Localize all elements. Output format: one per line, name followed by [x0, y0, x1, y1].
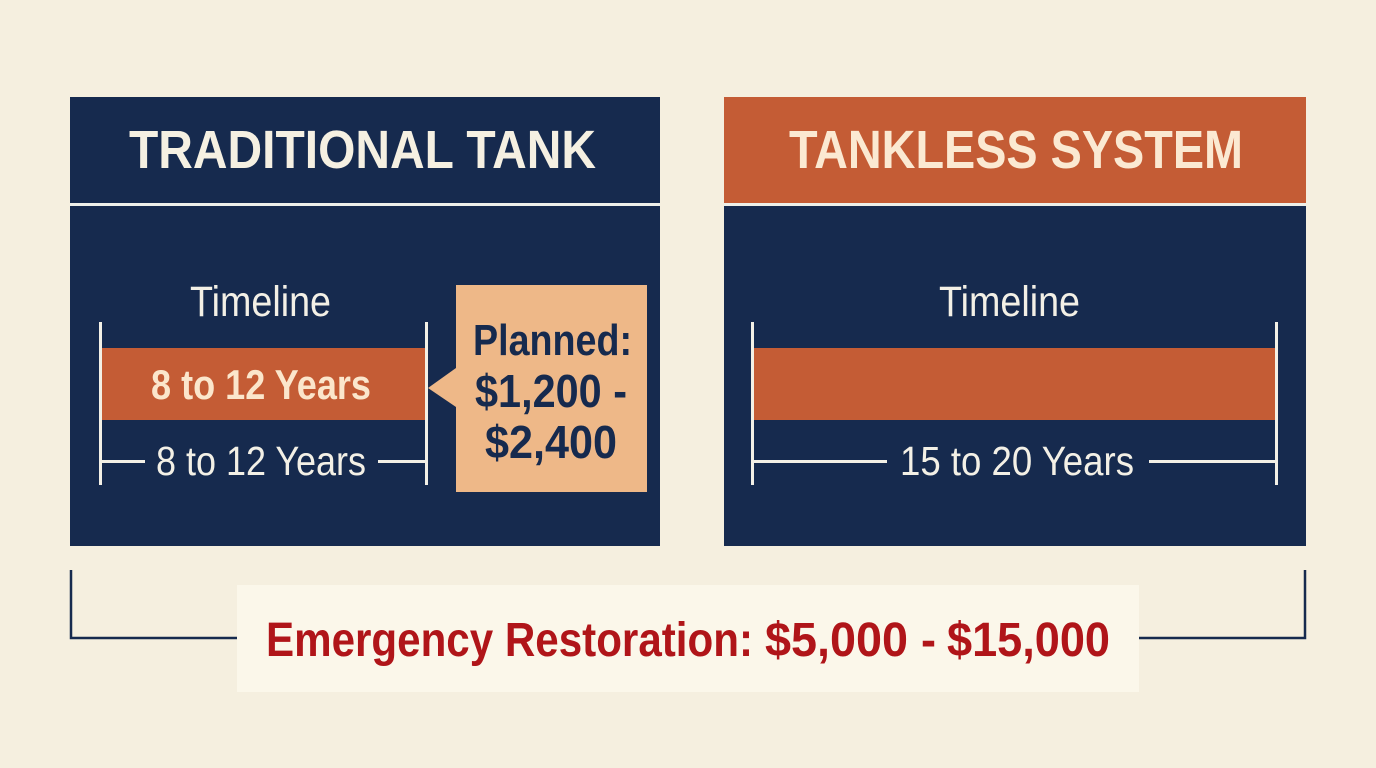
timeline bracket: 8 to 12 years: [99, 322, 428, 485]
timeline bracket: 8 to 12 years: 8 to 12 Years: [156, 438, 366, 484]
panel: traditional tank: [70, 97, 660, 546]
callout: planned cost: $1,200 -: [475, 365, 627, 417]
callout: emergency restoration cost: -: [921, 614, 936, 667]
panel: tankless system: [724, 97, 1306, 546]
panel body: traditional tank timeline: [70, 206, 660, 546]
callout: emergency restoration cost: [237, 585, 1139, 692]
heading: tankless system: TANKLESS SYSTEM: [789, 120, 1243, 180]
panel body: tankless system timeline: [724, 206, 1306, 546]
panel header: traditional tank: [70, 97, 660, 203]
bracket connecting both systems: [71, 570, 1305, 638]
callout: planned cost: Planned:: [473, 316, 632, 365]
heading: traditional tank: TRADITIONAL TANK: [129, 120, 596, 180]
callout: emergency restoration cost: Emergency Restoration:: [266, 614, 753, 667]
callout: emergency restoration cost: $5,000: [765, 614, 908, 667]
callout: emergency restoration cost: $15,000: [947, 614, 1110, 667]
timeline bar: 8 to 12 years: [101, 348, 425, 420]
panel header: tankless system: [724, 97, 1306, 203]
timeline bracket: 15 to 20 years: 15 to 20 Years: [900, 438, 1134, 484]
label: timeline: Timeline: [939, 278, 1080, 326]
timeline bracket: 15 to 20 years: [751, 322, 1278, 485]
timeline bar: tankless: [754, 348, 1275, 420]
label: timeline: Timeline: [190, 278, 331, 326]
callout: planned cost: [428, 285, 647, 492]
callout: planned cost: $2,400: [485, 416, 617, 468]
timeline bar: 8 to 12 years: 8 to 12 Years: [151, 361, 371, 408]
